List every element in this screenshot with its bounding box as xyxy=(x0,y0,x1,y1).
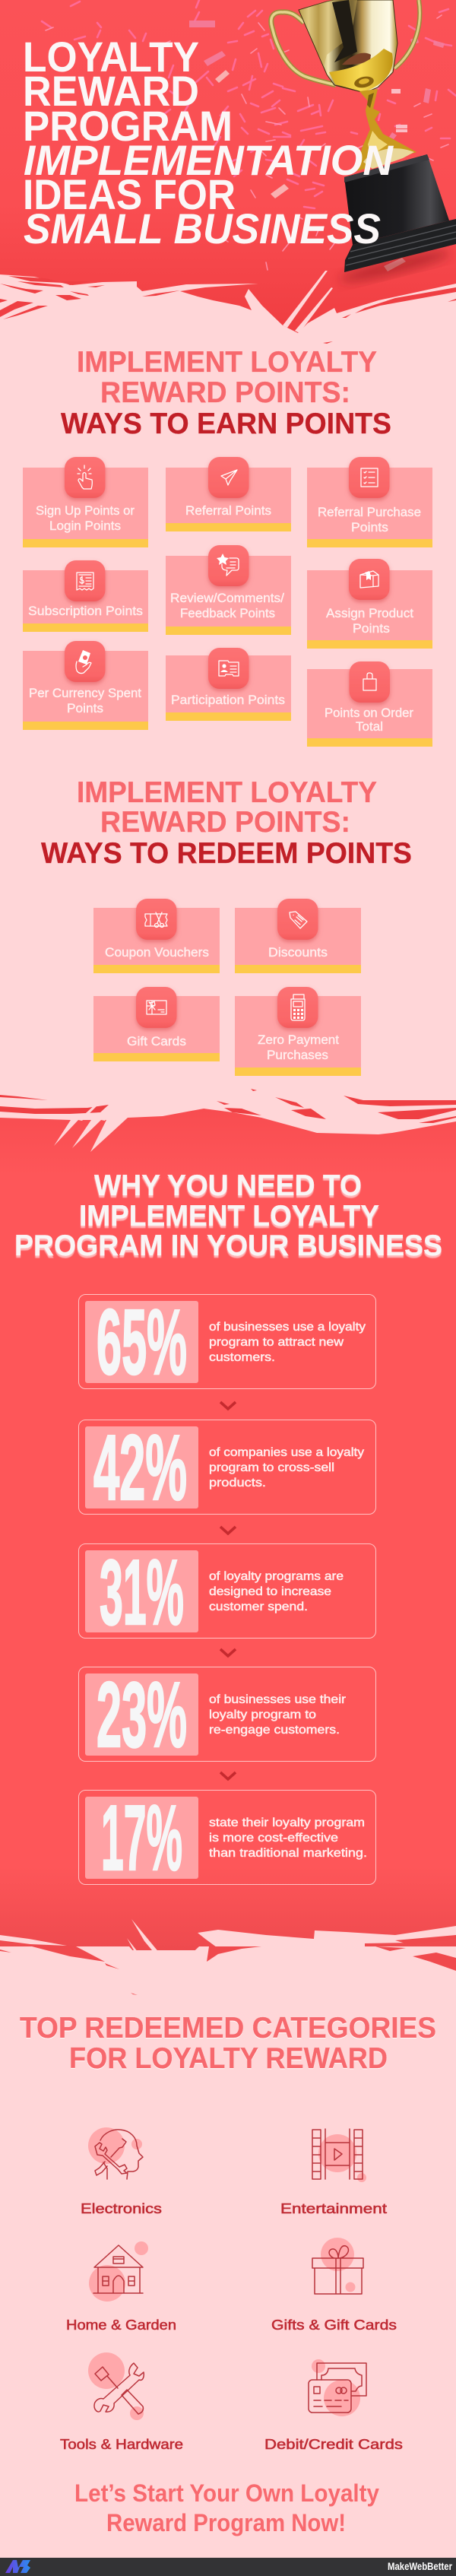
panel: hero header xyxy=(0,0,456,338)
brush divider: hero to pink xyxy=(0,271,456,365)
card: per currency spent points: Points xyxy=(67,702,103,715)
stat: 65%: program to attract new xyxy=(209,1336,344,1349)
title: IDEAS FOR xyxy=(23,170,236,218)
heading: top redeemed categories: TOP REDEEMED CATEGORIES xyxy=(20,2012,436,2045)
icon: hand with banknote xyxy=(65,641,105,682)
stat: 23%: loyalty program to xyxy=(209,1708,316,1721)
heading: ways to redeem points: IMPLEMENT LOYALTY xyxy=(77,776,377,809)
trophy handles xyxy=(271,0,420,85)
stat: 65%: 65% xyxy=(97,1290,187,1394)
card: assign product points: Assign Product xyxy=(326,607,413,620)
icon: head with tools xyxy=(88,2127,143,2179)
arrow: chevron xyxy=(220,1527,236,1534)
card: referral purchase points xyxy=(307,457,432,547)
category: electronics xyxy=(81,2127,162,2216)
title: PROGRAM xyxy=(23,102,233,150)
trophy base xyxy=(344,154,456,272)
stat: 65% xyxy=(79,1290,375,1394)
stat: 23%: 23% xyxy=(97,1663,187,1766)
card: coupon vouchers: Coupon Vouchers xyxy=(105,946,209,960)
card: zero payment purchases xyxy=(235,987,361,1076)
logo mark xyxy=(5,2560,30,2573)
card: sign up points: Login Points xyxy=(49,519,121,533)
card: discounts: Discounts xyxy=(268,946,328,960)
panel: why you need a loyalty program xyxy=(0,1089,456,1950)
stat: 42%: of companies use a loyalty xyxy=(209,1446,364,1459)
card: participation points xyxy=(166,648,291,721)
stat: 31% xyxy=(79,1540,375,1644)
category: tools and hardware: Tools & Hardware xyxy=(60,2436,183,2452)
icon: paper plane xyxy=(208,457,249,498)
icon: coupon and scissors xyxy=(136,899,176,940)
card: referral points xyxy=(166,457,291,531)
icon: payment terminal xyxy=(277,987,318,1028)
stat: 23%: re-engage customers. xyxy=(209,1724,340,1737)
stat: 17%: state their loyalty program xyxy=(209,1816,365,1829)
card: sign up points: Sign Up Points or xyxy=(36,504,135,518)
stat: 31%: 31% xyxy=(100,1540,184,1644)
arrow: chevron xyxy=(220,1772,236,1779)
stat: 31%: designed to increase xyxy=(209,1585,331,1598)
card: gift cards: Gift Cards xyxy=(127,1035,186,1048)
stat: 42%: products. xyxy=(209,1477,266,1489)
card: points on order total xyxy=(307,661,432,747)
card: per currency spent points xyxy=(23,641,148,730)
heading: ways to redeem points: WAYS TO REDEEM POINTS xyxy=(41,837,412,870)
stat: 23%: of businesses use their xyxy=(209,1693,347,1706)
card: points on order total: Points on Order xyxy=(325,706,414,720)
brush divider: red to pink xyxy=(0,1919,456,2053)
heading: ways to redeem points: REWARD POINTS: xyxy=(100,806,350,839)
card: review comments feedback points xyxy=(166,545,291,635)
trophy stem xyxy=(357,89,416,171)
card: zero payment purchases: Purchases xyxy=(267,1048,328,1062)
heading: ways to redeem points xyxy=(41,776,412,870)
stat: 23% xyxy=(79,1663,375,1766)
heading: ways to earn points: WAYS TO EARN POINTS xyxy=(61,408,391,440)
card: discounts xyxy=(235,899,361,973)
category: electronics: Electronics xyxy=(81,2200,162,2216)
stat: 17%: 17% xyxy=(101,1786,182,1889)
heading: why you need: WHY YOU NEED TO xyxy=(94,1169,362,1202)
stat: 17%: than traditional marketing. xyxy=(209,1847,367,1860)
icon: crossed wrench and screwdriver xyxy=(88,2352,144,2420)
icon: film strip xyxy=(312,2129,366,2182)
call to action xyxy=(74,2479,379,2536)
stat: 42% xyxy=(79,1416,375,1519)
category: gifts and gift cards: Gifts & Gift Cards xyxy=(271,2317,397,2333)
stat: 31%: of loyalty programs are xyxy=(209,1570,344,1583)
heading: why you need: PROGRAM IN YOUR BUSINESS xyxy=(14,1229,442,1262)
arrow: chevron xyxy=(220,1649,236,1656)
card: participation points: Participation Points xyxy=(171,693,285,707)
icon: checklist xyxy=(349,457,389,498)
stat: 65%: of businesses use a loyalty xyxy=(209,1321,366,1334)
stat: 17% xyxy=(79,1786,375,1889)
card: review comments feedback points: Review/Comments/ xyxy=(170,592,284,605)
icon: shopping bag xyxy=(350,661,390,703)
heading: ways to earn points: IMPLEMENT LOYALTY xyxy=(77,346,377,379)
title: IMPLEMENTATION xyxy=(24,136,394,184)
card: referral purchase points: Referral Purchase xyxy=(318,506,421,519)
category: entertainment: Entertainment xyxy=(280,2200,387,2216)
confetti xyxy=(42,0,456,271)
stat: 65%: customers. xyxy=(209,1351,275,1364)
icon: box xyxy=(349,559,389,600)
title: SMALL BUSINESS xyxy=(24,205,381,252)
card: subscription points xyxy=(23,560,148,632)
icon: gift card xyxy=(136,987,176,1028)
call to action: Let’s Start Your Own Loyalty xyxy=(74,2479,379,2507)
heading: why you need: IMPLEMENT LOYALTY xyxy=(79,1200,379,1232)
card: coupon vouchers xyxy=(93,899,220,973)
footer bar xyxy=(0,2558,456,2576)
category: home and garden xyxy=(66,2241,176,2333)
card: per currency spent points: Per Currency Spent xyxy=(29,687,141,700)
icon: price tag xyxy=(277,899,318,940)
call to action: Reward Program Now! xyxy=(106,2509,346,2536)
card: sign up points xyxy=(23,457,148,547)
card: referral purchase points: Points xyxy=(351,521,388,535)
heading: ways to earn points xyxy=(61,346,391,440)
stat: 42%: 42% xyxy=(93,1416,187,1519)
card: assign product points xyxy=(307,559,432,649)
category: home and garden: Home & Garden xyxy=(66,2317,176,2333)
stat: 31%: customer spend. xyxy=(209,1600,308,1613)
category: debit and credit cards xyxy=(264,2359,403,2452)
card: assign product points: Points xyxy=(353,622,390,636)
icon: card and banknote xyxy=(309,2359,366,2416)
heading: top redeemed categories xyxy=(20,2012,436,2075)
brush divider: pink to red xyxy=(0,1089,456,1950)
icon: tapping hand xyxy=(65,457,105,498)
title: LOYALTY xyxy=(23,33,199,81)
category: entertainment xyxy=(280,2129,387,2216)
category: tools and hardware xyxy=(60,2352,183,2452)
trophy cup xyxy=(299,0,397,93)
icon: gift box xyxy=(312,2238,363,2294)
icon: star speech bubble xyxy=(208,545,249,586)
icon: id card xyxy=(208,648,249,689)
title: REWARD xyxy=(23,67,199,115)
title xyxy=(23,33,394,252)
card: review comments feedback points: Feedback Points xyxy=(180,607,275,620)
icon: receipt xyxy=(65,560,105,601)
heading: why you need xyxy=(14,1169,442,1262)
heading: ways to earn points: REWARD POINTS: xyxy=(100,376,350,409)
icon: house xyxy=(89,2241,148,2302)
card: subscription points: Subscription Points xyxy=(28,604,143,618)
card: referral points: Referral Points xyxy=(185,504,271,518)
heading: top redeemed categories: FOR LOYALTY REWARD xyxy=(69,2042,388,2075)
stat: 17%: is more cost-effective xyxy=(209,1832,338,1845)
card: zero payment purchases: Zero Payment xyxy=(258,1033,339,1047)
category: debit and credit cards: Debit/Credit Cards xyxy=(264,2436,403,2452)
card: gift cards xyxy=(93,987,220,1061)
category: gifts and gift cards xyxy=(271,2238,397,2333)
card: points on order total: Total xyxy=(356,720,383,734)
trophy xyxy=(271,0,456,287)
stat: 42%: program to cross-sell xyxy=(209,1461,334,1474)
arrow: chevron xyxy=(220,1402,236,1409)
